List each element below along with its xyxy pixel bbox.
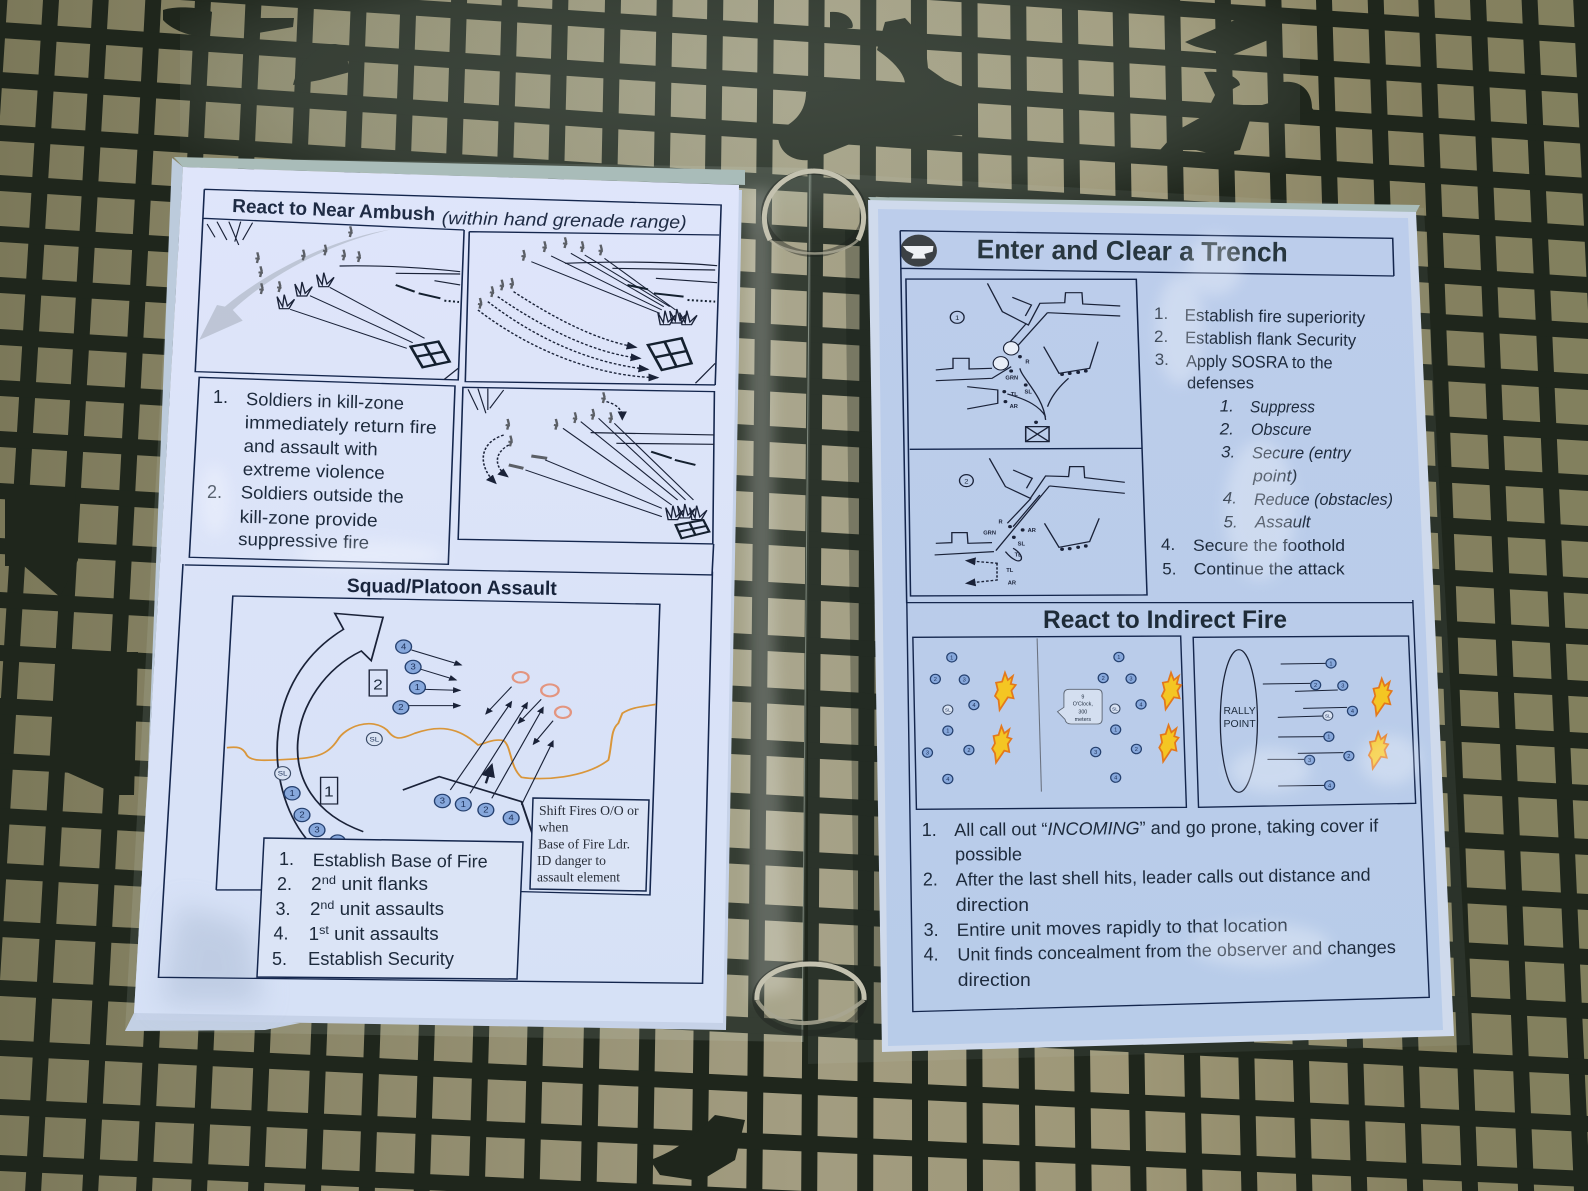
panel: trench diagram 2: SL [1018, 542, 1026, 547]
callout: nine o'clock bubble: O'Clock, [1073, 702, 1093, 708]
panel: indirect fire diagram right: SL [1325, 714, 1331, 719]
text block: indirect fire steps: 4. [924, 945, 939, 965]
text block: assault steps box: st [319, 923, 330, 937]
panel: trench diagram 1: GRN [1005, 376, 1018, 381]
text block: indirect fire steps: possible [955, 845, 1022, 865]
text block: indirect fire steps: After the last shell hits, leader calls out distance and [956, 865, 1371, 890]
panel: indirect fire diagram right: 1 [1327, 735, 1330, 741]
unit circles [275, 640, 519, 848]
text block: trench steps: 3. [1221, 443, 1235, 462]
text block: trench steps: Obscure [1251, 420, 1312, 439]
text block: near ambush steps: immediately return fire [245, 412, 437, 438]
panel: indirect fire diagram right: 3 [1341, 684, 1344, 690]
callout: nine o'clock bubble: 300 [1078, 709, 1087, 715]
text block: assault steps box: unit flanks [336, 874, 428, 894]
text block: near ambush steps: extreme violence [243, 459, 385, 483]
text block: assault steps box: 1. [279, 849, 294, 869]
text block: assault steps box: Establish Security [308, 949, 454, 969]
title: react to near ambush: (within hand grenade range) [442, 208, 687, 232]
icon: bottom binder ring [755, 963, 865, 1033]
panel: indirect fire diagram left: 1 [946, 729, 949, 735]
text block: assault steps box: 2 [310, 899, 320, 919]
unit circles: SL [278, 769, 287, 777]
panel: trench diagram 1 [906, 279, 1147, 596]
text block: assault steps box: nd [320, 898, 334, 912]
text block: trench steps: 5. [1224, 512, 1238, 531]
callout: shift fires: ID danger to [537, 853, 606, 868]
text block: indirect fire steps: 2. [923, 870, 938, 890]
binder strip: clear plastic sleeves [125, 157, 1470, 1064]
text block: trench steps: Establish flank Security [1185, 328, 1357, 350]
panel: indirect fire diagram left: 1 [950, 655, 953, 661]
flank arrow [277, 613, 383, 838]
fire arrows [403, 650, 553, 837]
panel: ambush diagram 1 [199, 222, 460, 379]
panel: trench diagram 1: SL [1025, 390, 1033, 395]
text block: assault steps box [257, 838, 523, 979]
panel: indirect fire diagram right: 1 [1329, 661, 1333, 667]
panel: trench diagram 2: AR [1008, 581, 1016, 586]
panel: indirect fire diagram left: SL [1112, 707, 1118, 712]
panel: trench diagram 2: AR [1028, 528, 1036, 534]
text block: trench steps: 1. [1220, 397, 1234, 416]
text block: assault steps box: 3. [276, 899, 291, 919]
title: enter and clear a trench: Enter and Clear a Trench [977, 234, 1288, 268]
text block: trench steps: Suppress [1250, 398, 1315, 417]
panel: indirect fire diagram left: 1 [1114, 728, 1117, 734]
text block: near ambush steps: 1. [213, 387, 228, 407]
heading: squad platoon assault: Squad/Platoon Assault [347, 575, 557, 600]
callout: nine o'clock bubble [1057, 689, 1102, 724]
panel: indirect fire diagram left [913, 636, 1186, 809]
panel: trench diagram 2: GRN [983, 531, 996, 536]
panel: indirect fire diagram left: 2 [967, 748, 971, 754]
panel: indirect fire diagram right: RALLY [1224, 706, 1256, 717]
text block: assault steps box: 5. [272, 949, 287, 969]
panel: trench diagram 2 [935, 458, 1125, 586]
panel: trench diagram 2: TL [1015, 553, 1022, 558]
glare: plastic reflections [201, 235, 1420, 967]
text block: trench steps: 1. [1154, 304, 1168, 323]
panel: trench diagram 2: 2 [964, 478, 969, 485]
text block: trench steps: Assault [1254, 513, 1312, 532]
text block: trench steps: 5. [1162, 559, 1176, 578]
panel: indirect fire diagram left: 3 [926, 751, 929, 757]
panel: indirect fire diagram left: 4 [946, 777, 949, 783]
text block: assault steps box: unit assaults [329, 924, 439, 944]
unit circles: 2 [483, 805, 489, 814]
panel: indirect fire diagram right: 4 [1351, 709, 1354, 715]
panel: indirect fire diagram right: POINT [1224, 719, 1256, 730]
panel: trench diagram 1: AR [1010, 404, 1018, 410]
text block: assault steps box: unit assaults [334, 899, 444, 919]
frame: indirect fire section ruled lines [907, 600, 1429, 1012]
unit circles: 1 [461, 800, 466, 809]
text block: near ambush steps: Soldiers outside the [241, 482, 404, 507]
text block: indirect fire steps: direction [958, 970, 1031, 990]
text block: trench steps: 3. [1155, 350, 1169, 369]
text block: trench steps: defenses [1187, 373, 1254, 392]
text block: assault steps box: 2 [311, 874, 321, 894]
text block: assault steps box: 2. [277, 874, 292, 894]
title: react to near ambush: React to Near Ambush [232, 196, 435, 225]
panel: indirect fire diagram left: 3 [1094, 750, 1097, 756]
icon: anvil badge [900, 235, 937, 267]
panel: indirect fire diagram left: 4 [1114, 776, 1117, 782]
heading: react to indirect fire: React to Indirect Fire [1043, 606, 1287, 634]
numbered unit boxes [321, 670, 387, 804]
frame: left card ruled lines [185, 189, 721, 575]
icon: explosions [1369, 679, 1392, 769]
panel: indirect fire diagram left: 2 [1102, 676, 1105, 682]
numbered unit boxes: 2 [373, 677, 383, 693]
text block: trench steps: Apply SOSRA to the [1186, 352, 1333, 372]
panel: indirect fire diagram left: 1 [1117, 655, 1120, 661]
frame: right card ruled lines [900, 231, 1413, 603]
callout: shift fires: when [538, 820, 569, 835]
text block: indirect fire steps: All call out “INCOMING” and go prone, taking cover if [954, 816, 1379, 840]
icon: top binder ring [764, 171, 864, 254]
unit circles: 1 [289, 789, 295, 798]
unit circles: 4 [509, 813, 514, 822]
text block: trench steps: Secure the foothold [1193, 536, 1345, 555]
panel: indirect fire diagram left: 4 [972, 703, 976, 709]
panel: indirect fire diagram left: 3 [1129, 677, 1133, 683]
panel: trench diagram 1: 1 [955, 314, 959, 322]
frame: assault section ruled lines [158, 564, 712, 983]
title: react to near ambush [232, 196, 687, 232]
text block: near ambush steps: suppressive fire [238, 529, 369, 553]
numbered unit boxes: 1 [324, 784, 334, 800]
callout: shift fires: assault element [537, 870, 620, 885]
text block: near ambush steps: and assault with [243, 436, 378, 459]
unit circles: 1 [415, 683, 420, 692]
callout: shift fires: Shift Fires O/O or [539, 803, 639, 818]
unit circles: 2 [299, 810, 305, 819]
panel: trench diagram 2: TL [1006, 568, 1014, 574]
text block: near ambush steps: 2. [207, 482, 222, 502]
callout: nine o'clock bubble: 9 [1081, 694, 1084, 700]
panel: trench diagram 2: R [999, 520, 1003, 525]
text block: near ambush steps: kill-zone provide [239, 507, 378, 531]
left card [134, 167, 742, 1030]
panel: trench diagram 1: TL [1011, 392, 1019, 398]
icon: explosions [992, 673, 1181, 763]
callout: shift fires [530, 798, 649, 891]
panel: indirect fire diagram left: 2 [934, 677, 937, 683]
panel: indirect fire diagram right: 2 [1314, 683, 1317, 689]
text block: assault steps box: 1 [309, 924, 319, 944]
text block: assault steps box: Establish Base of Fire [313, 850, 488, 872]
text block: trench steps: 4. [1161, 535, 1175, 554]
text block: trench steps: Establish fire superiority [1184, 306, 1366, 328]
callout: shift fires: Base of Fire Ldr. [538, 836, 630, 851]
text block: indirect fire steps: Unit finds concealment from the observer and changes [957, 937, 1396, 965]
callout: nine o'clock bubble: meters [1075, 717, 1091, 723]
panel: trench diagram 1: R [1025, 360, 1030, 365]
orange terrain line [227, 704, 656, 779]
panel: indirect fire diagram left: SL [945, 708, 951, 713]
unit circles: SL [370, 735, 379, 743]
text block: indirect fire steps [922, 816, 1396, 990]
text block: trench steps [1154, 304, 1393, 578]
text block: indirect fire steps: 1. [922, 820, 937, 840]
text block: assault steps box: 4. [274, 924, 289, 944]
text block: indirect fire steps: Entire unit moves rapidly to that location [957, 915, 1288, 940]
unit circles: 4 [401, 642, 406, 651]
unit circles: 2 [398, 703, 404, 712]
text block: trench steps: Continue the attack [1194, 559, 1345, 578]
panel: indirect fire diagram right: 3 [1308, 758, 1311, 764]
panel: indirect fire diagram left: 3 [963, 678, 966, 684]
text block: near ambush steps [207, 387, 437, 553]
text block: trench steps: 4. [1223, 488, 1237, 507]
text block: indirect fire steps: 3. [924, 920, 939, 940]
unit circles: 3 [440, 796, 445, 805]
panel: indirect fire diagram left: 2 [1135, 747, 1138, 753]
panel: indirect fire diagram right [1193, 636, 1416, 807]
text block: trench steps: 2. [1219, 419, 1234, 438]
enemy rings [513, 672, 571, 718]
text block: indirect fire steps: direction [956, 895, 1029, 915]
panel: indirect fire diagram right: 2 [1347, 754, 1350, 760]
right card [868, 200, 1454, 1052]
text block: trench steps: Reduce (obstacles) [1254, 490, 1393, 509]
text block: trench steps: Secure (entry [1252, 444, 1352, 463]
panel: indirect fire diagram right: 4 [1328, 783, 1331, 789]
text block: trench steps: 2. [1154, 327, 1168, 346]
panel: ambush diagram 2 [478, 237, 717, 383]
panel: indirect fire diagram left: 4 [1139, 702, 1143, 708]
text block: trench steps: point) [1252, 467, 1297, 486]
panel: ambush diagram 3 [468, 389, 714, 538]
text block: near ambush steps: Soldiers in kill-zone [246, 389, 404, 413]
unit circles: 3 [314, 825, 320, 834]
chart: squad assault diagram [227, 613, 656, 848]
text block: assault steps box: nd [322, 873, 336, 887]
unit circles: 3 [410, 662, 416, 671]
